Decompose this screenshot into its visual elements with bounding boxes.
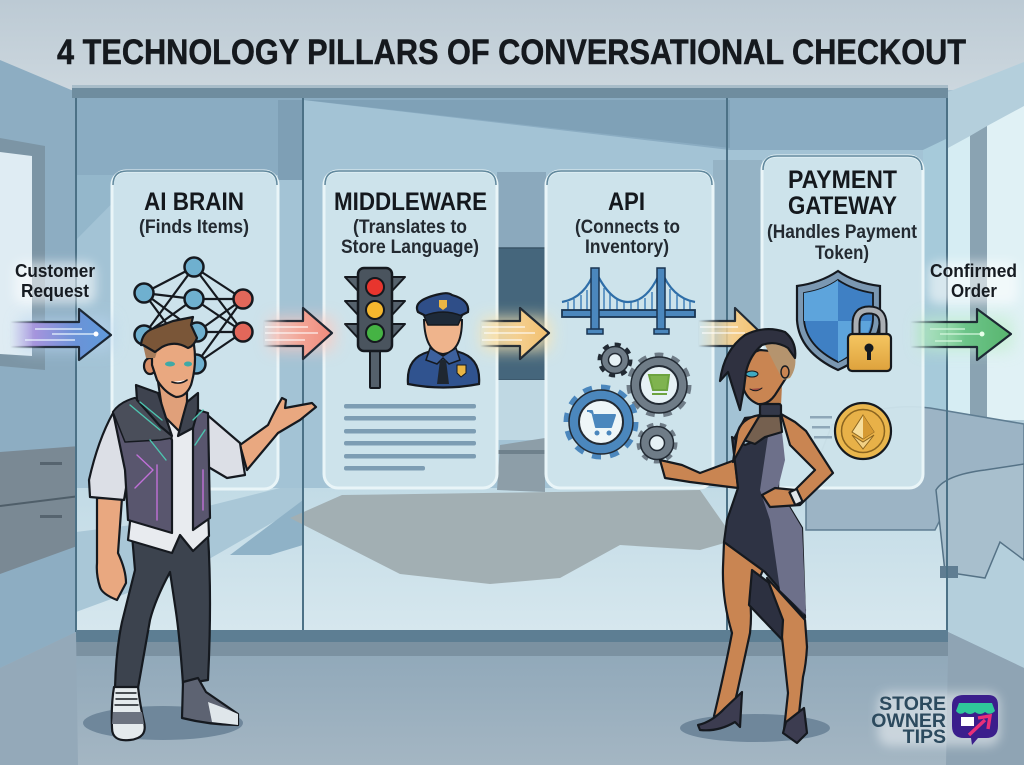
arrow: yellow 2 (698, 308, 761, 359)
dress tail (749, 570, 805, 648)
vest collar right (178, 393, 198, 436)
right sleeve (205, 413, 245, 478)
vest collar (136, 385, 172, 436)
text lines (344, 404, 476, 470)
icon: grey gear with cart (630, 356, 688, 414)
heading: AI BRAIN (144, 188, 244, 216)
logo: Store Owner Tips (871, 692, 1000, 748)
speed lines (810, 416, 832, 438)
glass interior (76, 98, 948, 630)
left shoe (112, 687, 145, 740)
subheading: (Translates to (353, 216, 467, 238)
icon: bridge (562, 268, 695, 334)
character: woman (660, 329, 833, 743)
icon: ethereum coin (835, 403, 891, 459)
icon: small gear bottom (639, 425, 675, 461)
eyes (165, 362, 192, 366)
icon: padlock (848, 310, 891, 371)
ear (144, 358, 156, 374)
shadow (83, 706, 243, 740)
vest circuit lines (130, 402, 205, 520)
right wall (948, 62, 1024, 668)
tv (497, 248, 547, 380)
heading: MIDDLEWARE (334, 188, 487, 216)
subheading: (Handles Payment (767, 221, 917, 243)
left arm (97, 498, 126, 600)
icon: shield (797, 271, 880, 370)
watch (789, 489, 803, 505)
rug (290, 490, 735, 584)
heading: API (608, 188, 645, 216)
couch (806, 407, 1024, 578)
subheading line 2: Store Language) (341, 236, 479, 258)
shaved side (765, 343, 795, 380)
character: man (83, 317, 316, 740)
label: Confirmed Order: Order (951, 280, 997, 301)
vest left panel (113, 398, 172, 533)
left window (0, 138, 45, 370)
left sleeve (89, 412, 134, 500)
label: Customer Request: Request (21, 280, 89, 301)
arrow: red (263, 308, 334, 359)
shaved side (143, 342, 160, 358)
label: Customer Request: Customer (15, 260, 95, 281)
eye (746, 371, 758, 377)
trousers (115, 535, 210, 688)
dress (724, 433, 805, 618)
hair (720, 329, 795, 410)
icon: police officer (408, 293, 479, 388)
window frame top (72, 85, 948, 98)
arrow: yellow (480, 308, 550, 359)
subheading line 2: Inventory) (585, 236, 669, 258)
left dresser (0, 446, 80, 574)
frame verticals (302, 98, 304, 630)
logo text (871, 693, 946, 748)
floor (0, 632, 1024, 765)
mouth (172, 380, 187, 383)
back wall below tv (497, 380, 547, 440)
logo icon (952, 695, 998, 745)
panel: Middleware (324, 171, 497, 488)
arrow: green (910, 309, 1012, 360)
neck (157, 375, 187, 432)
right shoe (783, 708, 807, 743)
panel: API (546, 171, 713, 488)
glass floor (76, 488, 948, 630)
right arm (240, 398, 316, 470)
icon: blue gear with cart (567, 388, 635, 456)
shadow (680, 714, 830, 742)
pointing arm (660, 460, 738, 488)
neck (762, 385, 782, 406)
hair (141, 317, 197, 352)
right shoe (182, 678, 238, 725)
logo text: OWNER (871, 710, 946, 732)
arrow: blue (10, 309, 112, 360)
subheading line 2: Token) (815, 242, 869, 264)
vest right panel (193, 410, 210, 530)
left wall (0, 60, 76, 668)
vest yoke (113, 398, 172, 442)
choker (760, 404, 781, 416)
logo text: TIPS (903, 726, 946, 748)
logo text: STORE (879, 693, 946, 715)
mesh top (735, 414, 782, 444)
label: Confirmed Order: Confirmed (930, 260, 1017, 281)
right leg (767, 578, 807, 730)
heading: PAYMENT (788, 166, 897, 194)
subheading: (Connects to (575, 216, 680, 238)
left shoe (698, 692, 742, 730)
label: Confirmed Order (928, 260, 1018, 304)
ear (781, 366, 789, 378)
panel: Payment Gateway (762, 156, 923, 488)
shoulders and arm (762, 414, 833, 507)
icon: small gear top (600, 345, 630, 375)
heading line 2: GATEWAY (788, 192, 897, 220)
left leg (714, 542, 763, 722)
lips (750, 388, 762, 391)
icon: neural network (134, 258, 252, 374)
icon: traffic light (345, 268, 405, 388)
shirt (128, 420, 209, 553)
label: Customer Request (14, 260, 96, 304)
frame bottom (76, 630, 948, 642)
left shoulder (733, 415, 760, 462)
face (152, 342, 195, 397)
subheading: (Finds Items) (139, 216, 249, 238)
console (497, 438, 545, 492)
panel: AI Brain (112, 171, 278, 489)
right windows (948, 106, 1024, 420)
face (742, 350, 787, 404)
